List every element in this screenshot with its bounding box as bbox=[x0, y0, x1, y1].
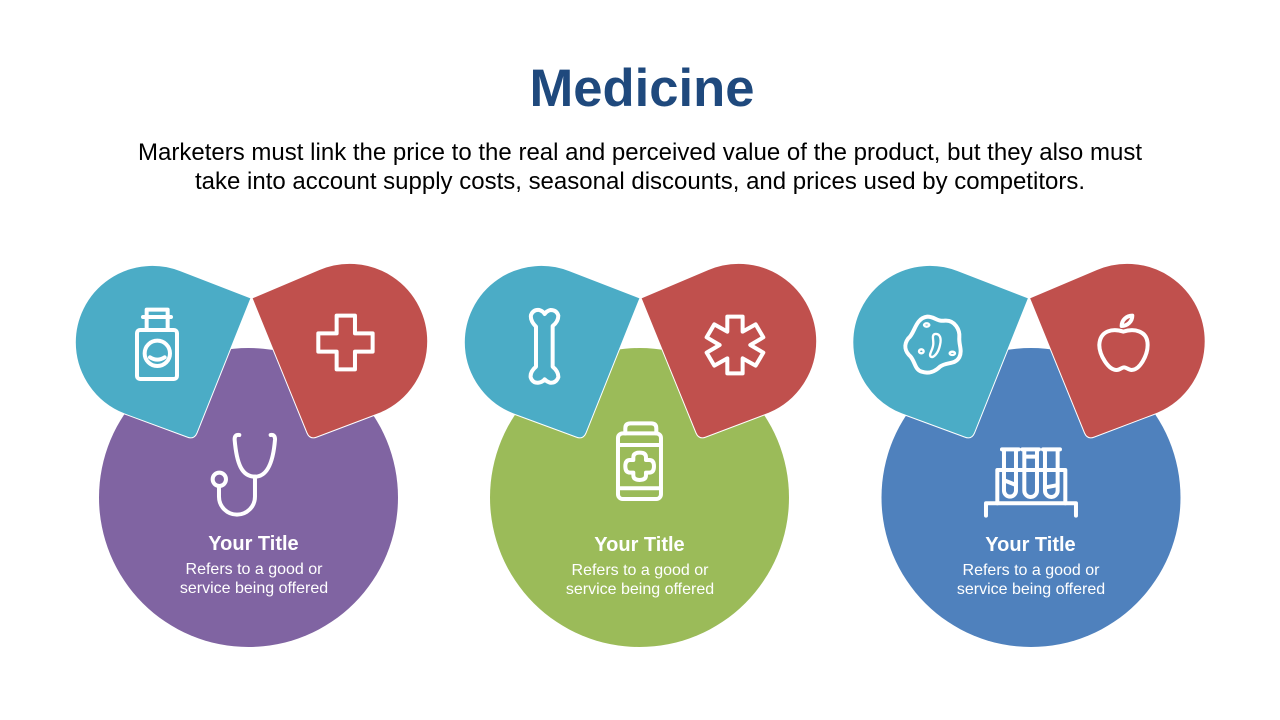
card text: Refers to a good or bbox=[186, 561, 323, 578]
description text: Marketers must link the price to the real and perceived value of the product, but they also must bbox=[138, 139, 1142, 166]
card text: Your Title bbox=[208, 533, 299, 555]
icon: bone bbox=[531, 310, 558, 383]
panel: green group bbox=[464, 263, 817, 647]
red petal bbox=[1030, 263, 1205, 438]
blue petal bbox=[853, 265, 1028, 438]
panel: blue group bbox=[853, 263, 1205, 647]
icon: cell bbox=[905, 317, 961, 373]
card text: service being offered bbox=[957, 581, 1105, 598]
blue petal bbox=[75, 265, 251, 438]
blue petal bbox=[464, 265, 640, 438]
green circle bbox=[490, 348, 789, 647]
card text: Refers to a good or bbox=[572, 562, 709, 579]
panel: purple group bbox=[75, 263, 428, 647]
card text: service being offered bbox=[566, 581, 714, 598]
card text: Refers to a good or bbox=[963, 562, 1100, 579]
description text bbox=[138, 139, 1142, 195]
icon: apple bbox=[1099, 316, 1148, 370]
icon: stethoscope bbox=[213, 435, 275, 515]
card text bbox=[957, 534, 1105, 598]
card text: service being offered bbox=[180, 580, 328, 597]
card text bbox=[180, 533, 328, 597]
description text: take into account supply costs, seasonal discounts, and prices used by competitors. bbox=[195, 168, 1085, 195]
blue circle bbox=[882, 348, 1180, 647]
red petal bbox=[641, 263, 817, 438]
icon: test tubes bbox=[986, 449, 1076, 516]
red petal bbox=[252, 263, 428, 438]
card text: Your Title bbox=[594, 534, 685, 556]
icon: bottle bbox=[137, 310, 177, 379]
icon: medicine bottle bbox=[618, 423, 661, 499]
purple circle bbox=[99, 348, 398, 647]
icon: asterisk bbox=[707, 317, 763, 373]
card text bbox=[566, 534, 714, 598]
card text: Your Title bbox=[985, 534, 1076, 556]
title: Medicine bbox=[530, 59, 754, 118]
icon: cross bbox=[318, 316, 373, 369]
